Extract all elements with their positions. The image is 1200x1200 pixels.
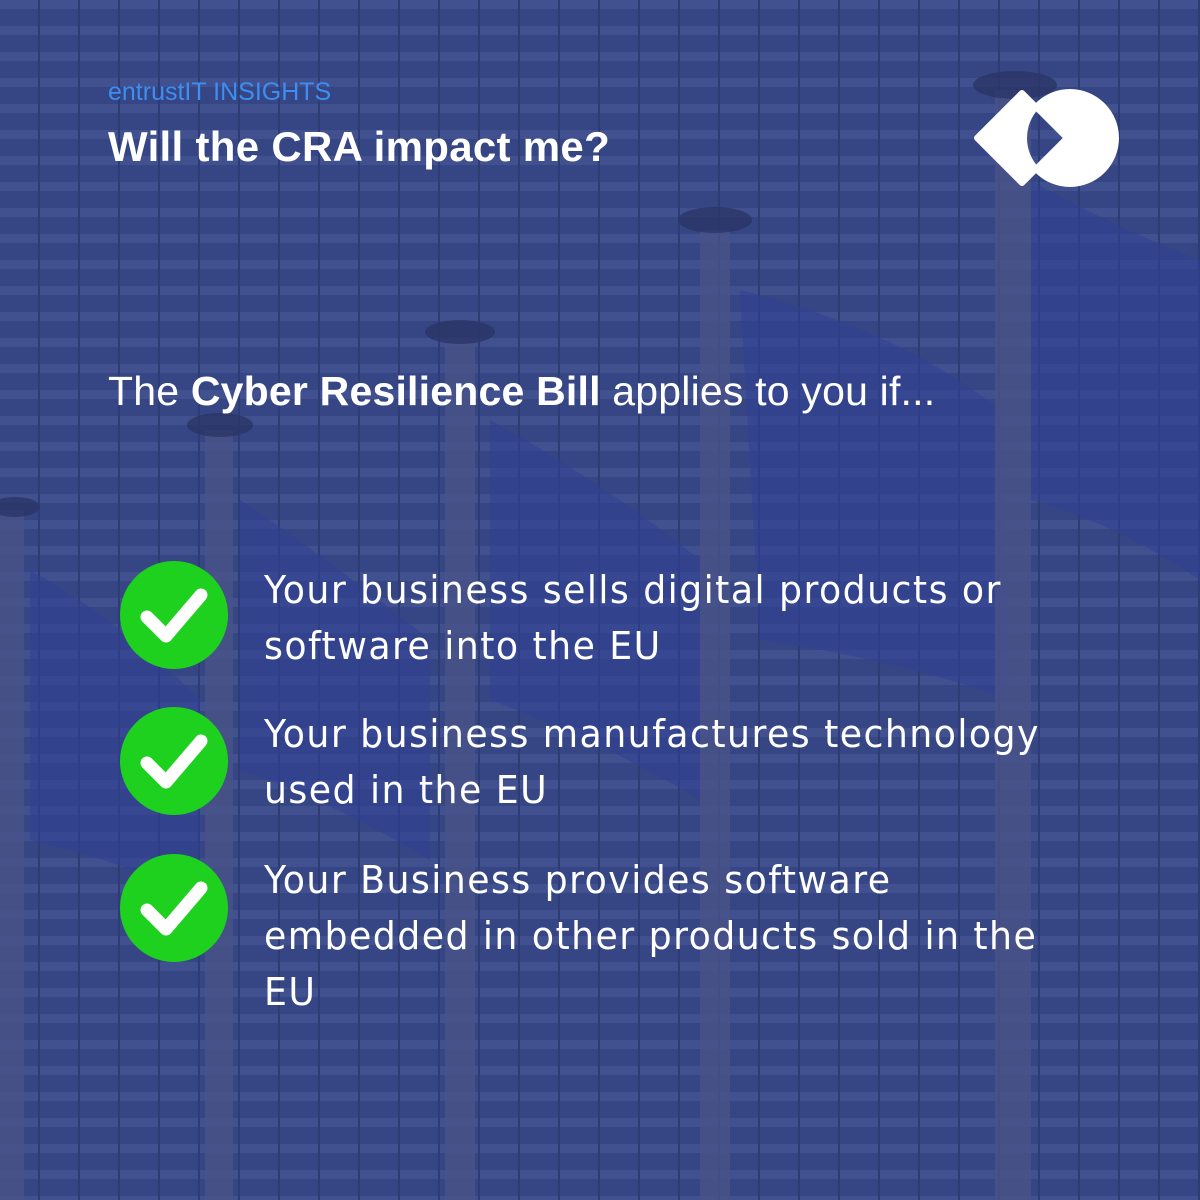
text 3: Your Business provides software embedded in other products sold in the EU bbox=[264, 858, 1037, 1014]
item 2 bbox=[120, 707, 1040, 815]
icon: check bbox=[120, 707, 228, 815]
kicker: entrustIT INSIGHTS: entrustIT INSIGHTS bbox=[108, 78, 331, 106]
icon: check bbox=[120, 561, 228, 669]
item 3 bbox=[120, 854, 1037, 1014]
title: Will the CRA impact me? bbox=[108, 123, 610, 170]
text 2: Your business manufactures technology used in the EU bbox=[264, 712, 1040, 812]
item 1 bbox=[120, 561, 1002, 669]
text 1: Your business sells digital products or software into the EU bbox=[264, 568, 1002, 668]
icon: check bbox=[120, 854, 228, 962]
subtitle: The Cyber Resilience Bill applies to you if... bbox=[108, 368, 935, 414]
logo bbox=[974, 89, 1119, 187]
